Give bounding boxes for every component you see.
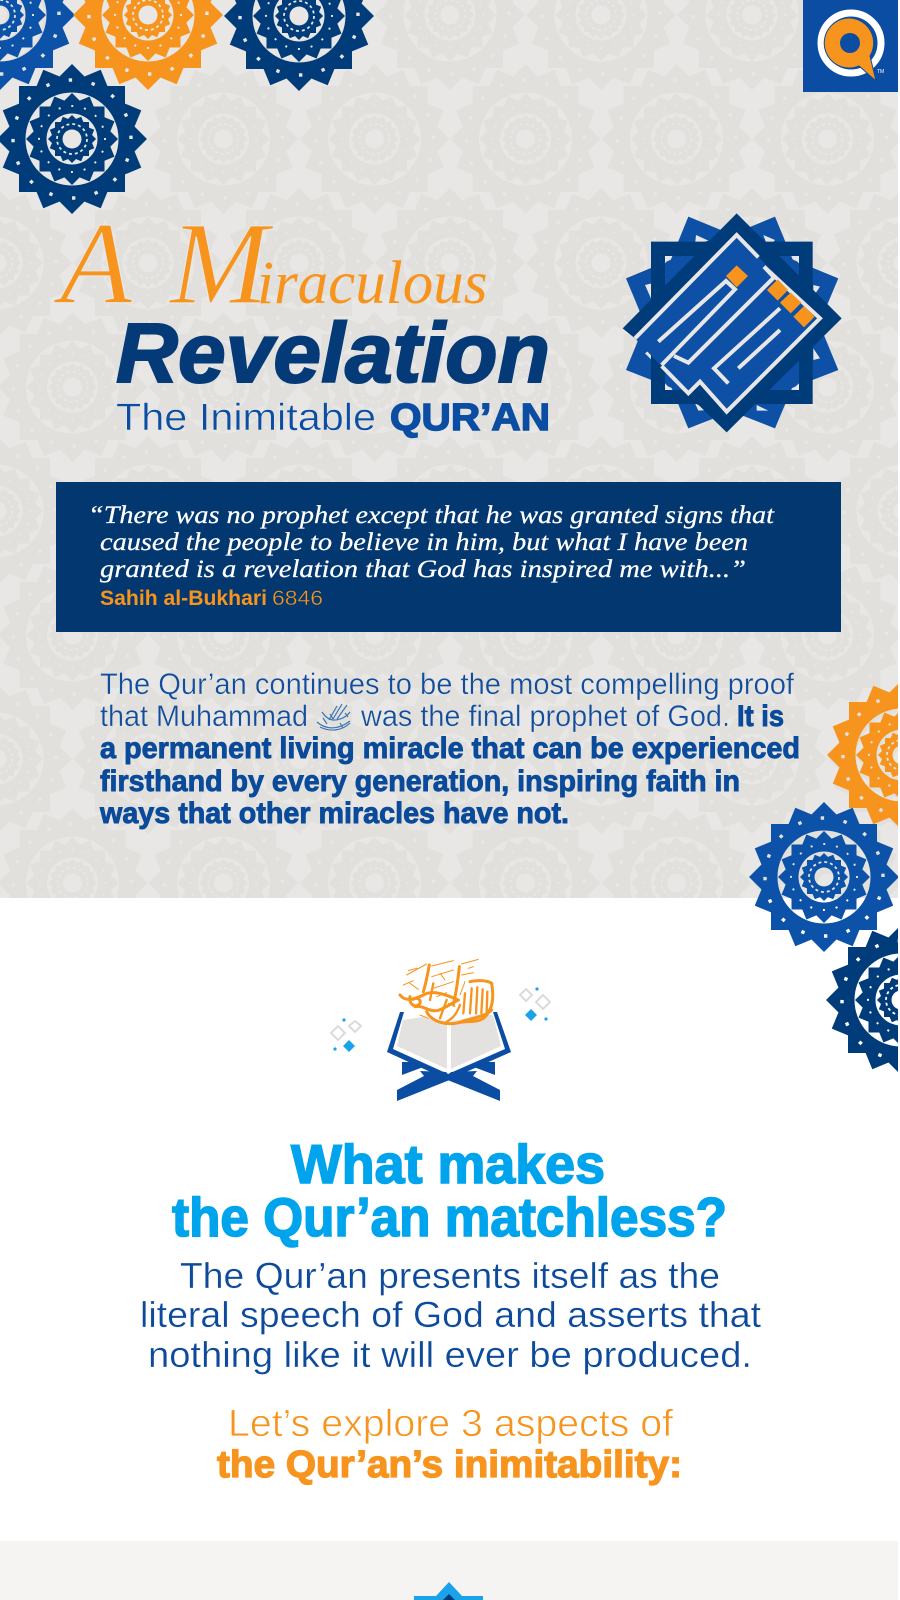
- icon: next section star: [414, 1582, 483, 1600]
- icon: lower navy medallion: [0, 59, 152, 219]
- heading: What makes the Qur'an matchless: [172, 1133, 727, 1248]
- quote text: granted is a revelation that God has inspired me with...”: [100, 556, 746, 583]
- icon: top orange medallion: [68, 0, 228, 95]
- text block: 3 aspects: [217, 1403, 682, 1486]
- quote text: caused the people to believe in him, but what I have been: [100, 529, 748, 556]
- subtitle: The Inimitable QUR'AN: QUR’AN: [390, 397, 550, 439]
- title: Revelation: Revelation: [116, 306, 550, 400]
- intro paragraph: was the final prophet of God.: [360, 700, 730, 733]
- icon: top navy medallion: [219, 0, 379, 96]
- quote source: 6846: [272, 587, 323, 610]
- icon: right orange medallion: [822, 675, 900, 835]
- panel: bottom grey section: [0, 1541, 900, 1600]
- icon: top-left blue medallion: [0, 0, 80, 95]
- subtitle: The Inimitable QUR'AN: [116, 397, 550, 439]
- intro paragraph: a permanent living miracle that can be experienced: [100, 732, 800, 765]
- icon: left sparkles: [331, 1018, 361, 1052]
- text block: literal speech of God: The Qur’an presents itself as the: [180, 1255, 720, 1296]
- panel: hadith quote: [56, 482, 841, 632]
- text block: literal speech of God: [140, 1255, 761, 1375]
- text block: 3 aspects: the Qur’an’s inimitability:: [217, 1444, 682, 1486]
- icon: honorific calligraphy: [317, 704, 350, 730]
- icon: right navy medallion: [821, 920, 900, 1080]
- text block: literal speech of God: nothing like it will ever be produced.: [148, 1334, 752, 1375]
- text block: 3 aspects: Let’s explore 3 aspects of: [228, 1403, 673, 1445]
- heading: What makes the Qur'an matchless: the Qur’an matchless?: [172, 1186, 727, 1248]
- icon: right sparkles: [520, 987, 550, 1021]
- book cover: [387, 1012, 511, 1080]
- intro paragraph: The Qur’an continues to be the most compelling proof: [100, 668, 795, 701]
- intro paragraph: that Muhammad: [100, 700, 308, 733]
- icon: right blue medallion: [744, 797, 900, 957]
- title: A Miraculous: A: [53, 198, 159, 329]
- book stand: [397, 1062, 500, 1101]
- panel: patterned header background: [0, 0, 898, 898]
- icon: kufic calligraphy emblem: [623, 213, 842, 432]
- heading: What makes the Qur'an matchless: What makes: [291, 1133, 605, 1195]
- bismillah calligraphy: [397, 959, 497, 1024]
- intro paragraph: [99, 668, 800, 830]
- intro paragraph: ways that other miracles have not.: [99, 797, 569, 830]
- book pages: [397, 1013, 501, 1069]
- title: A Miraculous: M: [168, 198, 274, 329]
- subtitle: The Inimitable QUR'AN: The Inimitable: [116, 397, 376, 439]
- text block: literal speech of God: literal speech of God and asserts that: [140, 1294, 761, 1335]
- icon: open Qur'an on stand with bismillah: [387, 959, 511, 1101]
- intro paragraph: firsthand by every generation, inspiring faith in: [100, 765, 740, 798]
- title: A Miraculous: iraculous: [257, 250, 487, 317]
- quote text: “There was no prophet except that he was granted signs that: [88, 502, 775, 529]
- quote source: Sahih al-Bukhari: [100, 587, 267, 610]
- icon: Q logo badge: [803, 0, 898, 92]
- quote text: [88, 502, 775, 583]
- icon: Q logo badge: TM: [877, 69, 884, 75]
- intro paragraph: It is: [737, 700, 784, 733]
